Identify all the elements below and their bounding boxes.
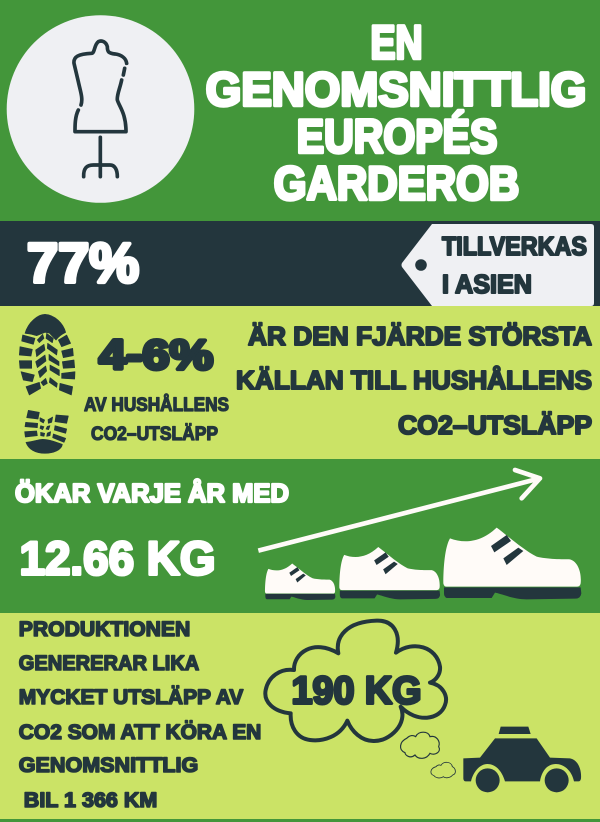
text: fourth largest source: CO2–UTSLÄPP bbox=[398, 410, 592, 440]
text: production emissions explanation: CO2 SOM ATT KÖRA EN bbox=[19, 721, 261, 744]
icon: mannequin bbox=[74, 41, 127, 177]
panel: production emissions background bbox=[0, 613, 600, 819]
text: production emissions explanation: GENOMSNITTLIG bbox=[19, 754, 198, 777]
price tag: made in Asia: TILLVERKAS bbox=[442, 231, 587, 261]
text: production emissions explanation bbox=[19, 618, 261, 812]
text: production emissions explanation: MYCKET UTSLÄPP AV bbox=[19, 686, 243, 709]
icon: car bbox=[463, 727, 581, 792]
price tag: made in Asia bbox=[402, 224, 594, 306]
icon: circle with mannequin bbox=[7, 15, 194, 203]
text: production emissions explanation: BIL 1 366 KM bbox=[24, 789, 157, 812]
icon: small shoe bbox=[265, 563, 335, 600]
text: fourth largest source: KÄLLAN TILL HUSHÅLLENS bbox=[236, 365, 592, 395]
text: increases every year by: ÖKAR VARJE ÅR MED bbox=[15, 478, 289, 508]
text: fourth largest source: ÄR DEN FJÄRDE STÖRSTA bbox=[248, 321, 592, 351]
title: EN bbox=[370, 16, 422, 68]
panel: header background bbox=[0, 0, 600, 221]
price tag: made in Asia: I ASIEN bbox=[442, 269, 532, 299]
title: GENOMSNITTLIG bbox=[206, 62, 586, 115]
title: GARDEROB bbox=[274, 156, 519, 209]
text: share of household emissions: CO2–UTSLÄPP bbox=[91, 424, 218, 445]
statistic: 4-6%: 4-6% bbox=[99, 331, 213, 378]
text: production emissions explanation: GENERERAR LIKA bbox=[19, 652, 199, 675]
icon: boot heel footprint bbox=[25, 410, 68, 453]
statistic: 190 KG: 190 KG bbox=[292, 670, 422, 712]
text: share of household emissions: AV HUSHÅLLENS bbox=[84, 395, 229, 416]
text: production emissions explanation: PRODUKTIONEN bbox=[19, 618, 190, 641]
icon: large shoe bbox=[443, 528, 581, 599]
title bbox=[206, 16, 586, 209]
icon: medium exhaust cloud bbox=[401, 732, 439, 758]
icon: boot sole footprint bbox=[19, 314, 75, 395]
statistic: 12.66 KG: 12.66 KG bbox=[20, 532, 216, 584]
bottom strip bbox=[0, 819, 600, 822]
panel: yearly increase background bbox=[0, 459, 600, 613]
icon: small exhaust cloud bbox=[431, 762, 455, 778]
arrow: rising trend bbox=[258, 470, 540, 551]
text: share of household emissions bbox=[84, 395, 229, 445]
text: fourth largest source bbox=[236, 321, 592, 440]
icon: medium shoe bbox=[339, 547, 440, 599]
icon: large emission cloud bbox=[265, 621, 446, 741]
statistic: 77%: 77% bbox=[27, 231, 139, 294]
panel: 77% band background bbox=[0, 221, 600, 306]
panel: CO2 share background bbox=[0, 306, 600, 459]
title: EUROPÉS bbox=[297, 109, 497, 162]
